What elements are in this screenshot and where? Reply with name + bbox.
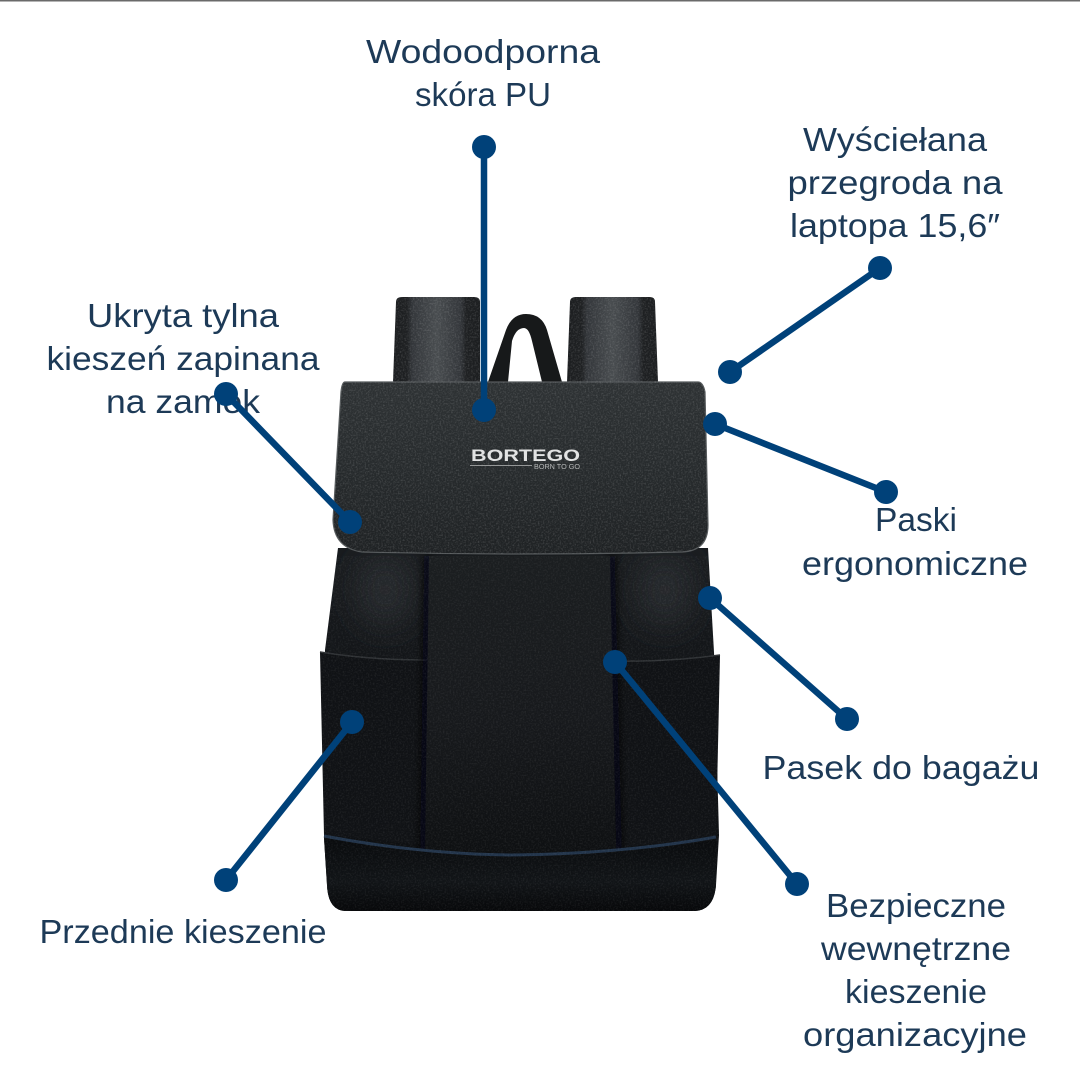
callout: Wodoodporna skóra PU: skóra PU: [415, 76, 551, 113]
callout: Wyściełana przegroda na laptopa: Wyściełana: [803, 121, 988, 158]
upper leather grain: [333, 297, 709, 555]
pocket top edges: [320, 652, 720, 661]
callout: Paski ergonomiczne: Paski: [875, 501, 957, 538]
callout: Bezpieczne wewnętrzne kieszenie: wewnętrzne: [820, 930, 1011, 967]
callout: Wodoodporna skóra PU: [366, 33, 601, 422]
callout: Pasek do bagażu: Pasek do bagażu: [762, 749, 1040, 786]
callout: Paski ergonomiczne: [703, 412, 1028, 582]
piping seam: [324, 836, 716, 855]
callout: Ukryta tylna kieszeń: Ukryta tylna: [87, 297, 280, 334]
callout: Pasek do bagażu: [698, 586, 1040, 786]
callout: Paski ergonomiczne: ergonomiczne: [802, 545, 1028, 582]
callout: Przednie kieszenie: [40, 710, 364, 950]
callout: Ukryta tylna kieszeń: na zamek: [106, 383, 261, 420]
top flap: [333, 382, 708, 554]
upper body highlights: [358, 559, 692, 623]
callout: Bezpieczne wewnętrzne kieszenie: organizacyjne: [803, 1016, 1027, 1053]
shoulder straps: [393, 297, 658, 382]
callout: Wyściełana przegroda na laptopa: [718, 121, 1003, 384]
right front pocket: [613, 655, 720, 848]
lower body: [324, 548, 719, 911]
central panel: [425, 556, 616, 852]
callout: Wodoodporna skóra PU: Wodoodporna: [366, 33, 601, 70]
callout: Przednie kieszenie: Przednie kieszenie: [40, 913, 326, 950]
brand logo: BORN TO GO: [534, 464, 581, 471]
callout: Ukryta tylna kieszeń: [46, 297, 362, 534]
callout: Wyściełana przegroda na laptopa: przegroda na: [788, 164, 1003, 201]
top handle: [488, 314, 562, 382]
callout: Bezpieczne wewnętrzne kieszenie: Bezpieczne: [826, 887, 1006, 924]
brand logo: [470, 446, 581, 471]
backpack product image: [320, 297, 720, 912]
callout: Bezpieczne wewnętrzne kieszenie: kieszenie: [845, 973, 987, 1010]
callout: Bezpieczne wewnętrzne kieszenie: [603, 650, 1027, 1053]
panel side shadows: [423, 556, 619, 850]
top border line: [0, 0, 1080, 2]
callout: Ukryta tylna kieszeń: kieszeń zapinana: [46, 340, 320, 377]
brand logo: BORTEGO: [471, 446, 580, 465]
lower leather grain: [320, 556, 720, 912]
left front pocket: [320, 652, 427, 845]
bottom base panel: [324, 838, 716, 911]
callout: Wyściełana przegroda na laptopa: laptopa 15,6″: [790, 207, 1000, 244]
